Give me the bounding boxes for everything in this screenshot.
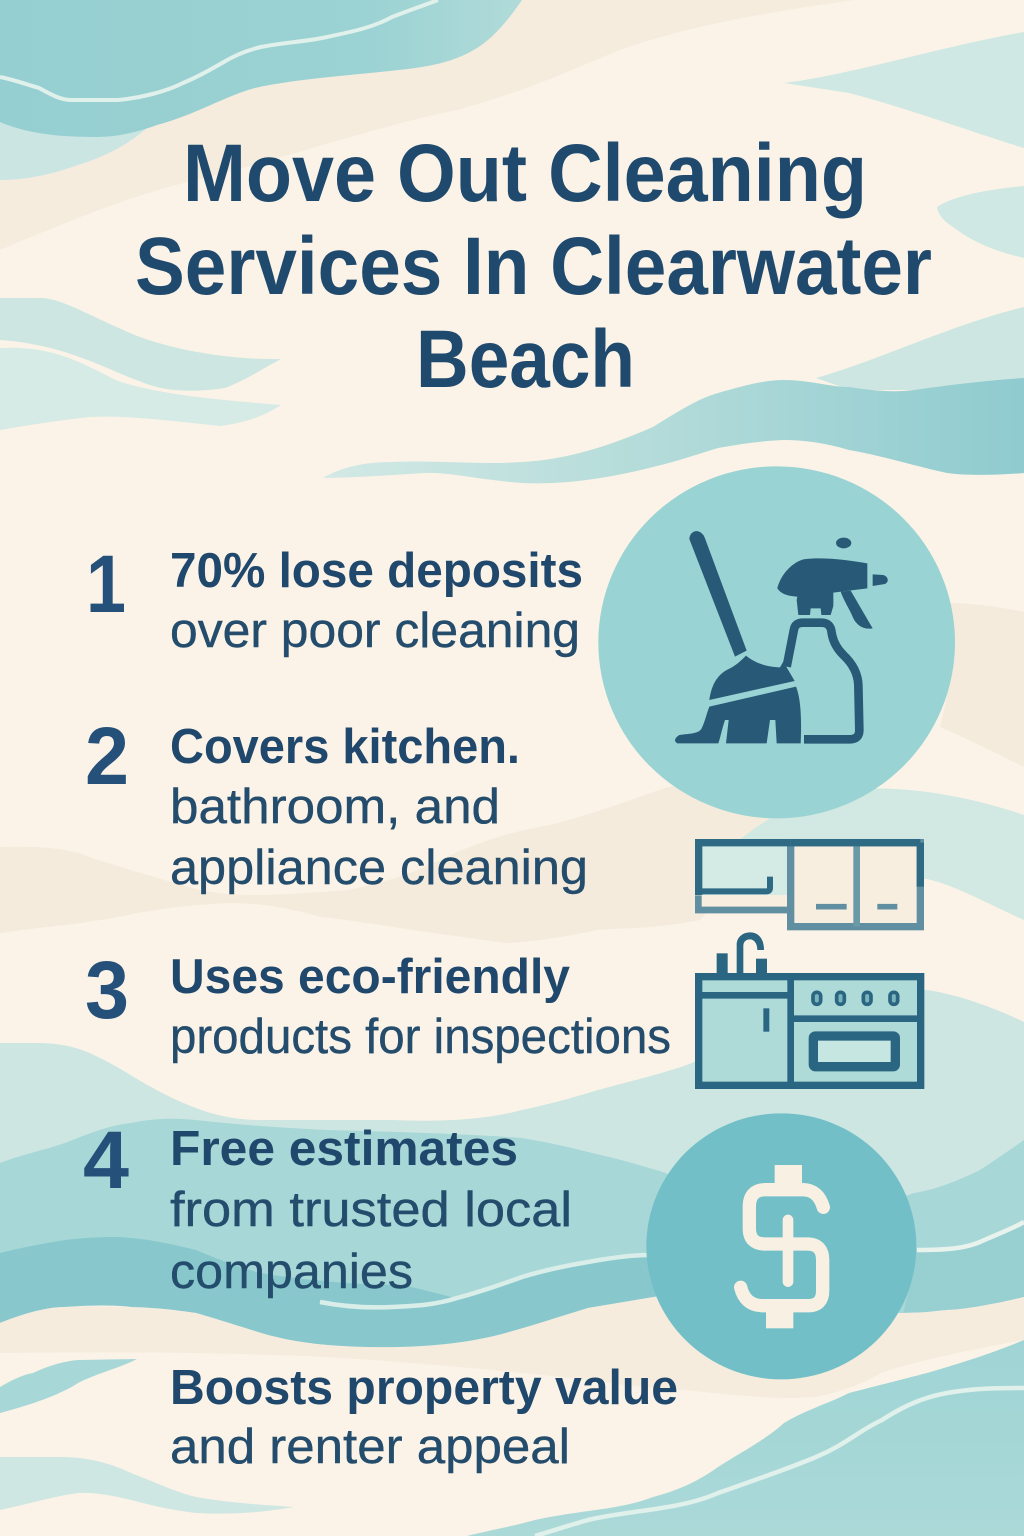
item 2 text: bathroom, and (170, 780, 500, 834)
item 4 text: companies (170, 1245, 413, 1299)
item 2 text: Covers kitchen. (170, 720, 520, 774)
title: Services In Clearwater (135, 221, 932, 312)
icon: broom and spray bottle (598, 466, 955, 818)
item 3 text (170, 950, 671, 1064)
number 2: 2 (85, 711, 129, 802)
item 1 text: over poor cleaning (170, 604, 580, 658)
number 4: 4 (83, 1115, 129, 1206)
number 3: 3 (85, 945, 129, 1036)
faucet (717, 932, 767, 974)
upper cabinets (695, 843, 920, 927)
item 2 text (170, 720, 588, 895)
item 1 text: 70% lose deposits (170, 544, 583, 598)
title: Beach (416, 314, 635, 405)
item 4 text: Free estimates (170, 1122, 518, 1176)
item 5 text: Boosts property value (170, 1361, 678, 1415)
item 5 text (170, 1361, 678, 1474)
title (135, 128, 932, 405)
item 2 text: appliance cleaning (170, 841, 588, 895)
item 4 text (170, 1122, 572, 1299)
lower cabinets and stove (699, 977, 921, 1085)
item 5 text: and renter appeal (170, 1420, 570, 1474)
item 3 text: Uses eco-friendly (170, 950, 570, 1004)
item 3 text: products for inspections (170, 1010, 671, 1064)
icon: kitchen cabinets and stove (695, 843, 921, 1085)
icon: dollar coin (646, 1113, 916, 1379)
item 4 text: from trusted local (170, 1183, 572, 1237)
item 1 text (170, 544, 583, 658)
number 1: 1 (86, 539, 126, 630)
title: Move Out Cleaning (183, 128, 867, 219)
